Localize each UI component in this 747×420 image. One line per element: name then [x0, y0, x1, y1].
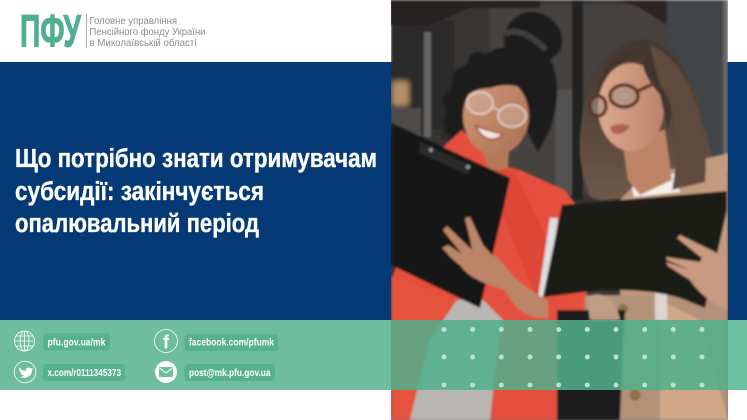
icon: twitter	[14, 361, 36, 383]
folder left	[391, 123, 510, 308]
organisation name: Пенсійного фонду України	[90, 26, 206, 38]
icon: facebook	[154, 330, 178, 354]
navy title panel	[0, 62, 747, 320]
title	[15, 145, 377, 238]
organisation name	[90, 16, 206, 49]
hand right	[666, 235, 728, 310]
folder right	[543, 191, 727, 308]
woman right: glasses	[590, 83, 655, 116]
email link: post@mk.pfu.gov.ua	[189, 368, 271, 379]
woman right: lips	[610, 124, 630, 134]
photo: two women with folders	[390, 0, 728, 420]
woman right: jacket	[618, 152, 728, 296]
website link: pfu.gov.ua/mk	[48, 338, 106, 348]
email link	[184, 364, 275, 381]
title: Що потрібно знати отримувачам	[15, 145, 377, 173]
icon: facebook: f	[163, 332, 170, 354]
logo: ПФУ: ПФУ	[20, 6, 82, 56]
twitter link: x.com/r0111345373	[48, 368, 121, 379]
facebook link: facebook.com/pfumk	[189, 338, 274, 348]
woman left: jacket	[391, 130, 590, 420]
website link	[43, 334, 110, 350]
woman left: hair	[391, 12, 728, 420]
footer band	[0, 320, 391, 390]
woman left: face	[482, 151, 510, 172]
woman left: glasses	[467, 92, 526, 127]
facebook link	[184, 334, 278, 351]
twitter link	[43, 364, 125, 381]
organisation name: в Миколаївській області	[90, 37, 196, 49]
dot grid	[442, 327, 704, 388]
woman right: hair	[579, 40, 713, 200]
title: субсидії: закінчується	[15, 178, 264, 206]
footer band right	[728, 320, 747, 390]
icon: globe	[14, 331, 34, 351]
woman right: face	[622, 130, 672, 195]
organisation name: Головне управління	[90, 16, 177, 27]
white paper	[538, 218, 558, 298]
icon: mail	[155, 361, 177, 383]
footer band over photo	[391, 320, 728, 390]
woman left: smile	[476, 126, 502, 139]
hand left	[442, 217, 548, 318]
logo: ПФУ	[20, 6, 87, 56]
title: опалювальний період	[15, 210, 259, 238]
